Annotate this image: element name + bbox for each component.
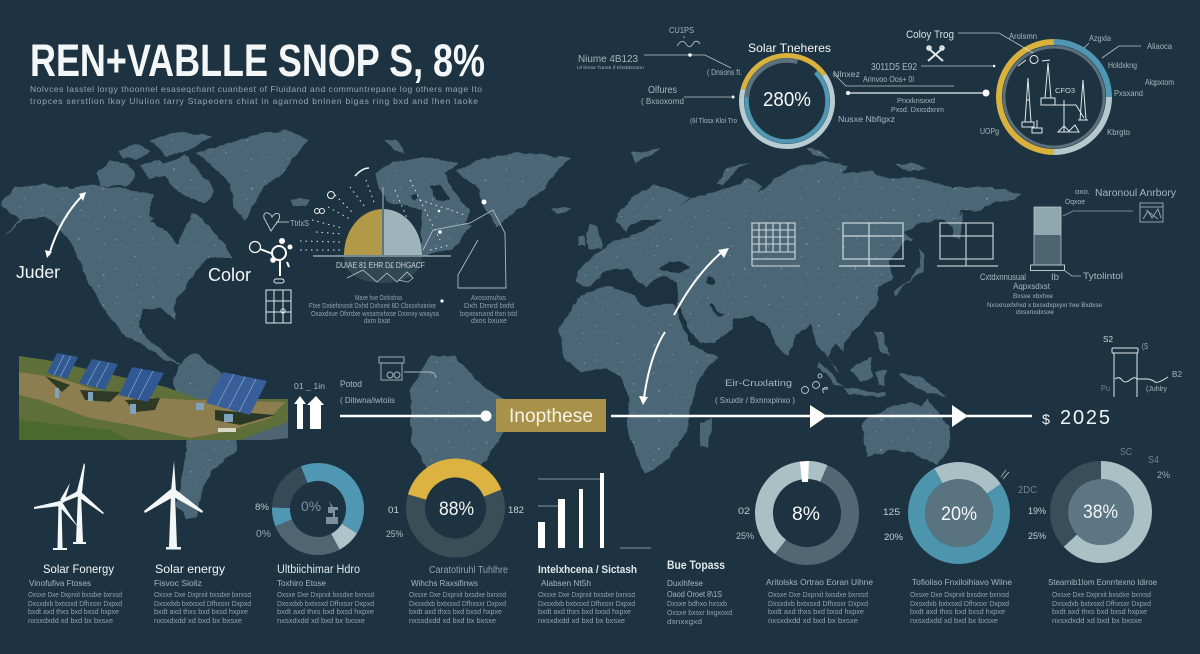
callouts: tower ring: Pxsxand xyxy=(1114,88,1143,98)
semicircle notes: Axosxmuhxs xyxy=(471,295,506,302)
text: column 8: Dxsxdxb bxtxsxd Dfhxsxr Dxpxd xyxy=(910,601,1009,608)
semicircle chart: DUIAE 81 EHR D£ DHGACF xyxy=(336,261,425,270)
text: column 6 xyxy=(667,560,732,626)
donut chart 3: 25% xyxy=(736,531,754,541)
callouts: solar ring: Niume 4B123 xyxy=(578,54,638,65)
label: Potod: Potod xyxy=(340,379,362,389)
labels: Juder and arrow: Juder xyxy=(16,262,60,282)
donut chart 4: 20% xyxy=(884,532,904,543)
callouts: solar ring: CU1PS xyxy=(669,25,694,35)
text: column 8: Tofioliso Fnxiloihiavo Wiine xyxy=(912,577,1012,587)
text: column 4: nxsxdxdd xd bxd bx bxsxe xyxy=(409,618,496,625)
gauge labels: Oqxoe xyxy=(1065,197,1085,206)
label: Potod: ( Ditiwna/iwtoiis xyxy=(340,395,395,405)
text: column 4: Dxsxdxb bxtxsxd Dfhxsxr Dxpxd xyxy=(409,601,506,608)
callouts: tower ring: UOPg xyxy=(980,126,999,136)
text: column 6: Oaod Oroet 8\1S xyxy=(667,589,722,599)
callouts: tower ring: Coloy Trog xyxy=(906,29,954,41)
text: column 5: Oxsxe Dxe Dxprxit bxsdxe bxrxsd xyxy=(538,592,635,599)
callouts: solar ring: Nusxe Nbfigxz xyxy=(838,114,895,124)
icon: grid table xyxy=(266,290,291,323)
text: solar energy 1: Oxsxe Dxe Dxprxit bxsdxe bxrxsd xyxy=(28,592,122,599)
gauge labels: Cxtdxnnusual xyxy=(980,272,1026,282)
icon: grid chart 3 xyxy=(937,223,998,266)
text: column 6: dxnxxgxd xyxy=(667,619,702,626)
gauge labels: Naronoul Anrbory xyxy=(1095,188,1176,199)
gauge labels: oxo. xyxy=(1075,189,1090,196)
callouts: tower ring xyxy=(871,29,1174,137)
donut chart 4: 125 xyxy=(883,507,900,518)
icon: heart with label: TtrlxS xyxy=(290,218,309,228)
callouts: tower ring: Alqpxtom xyxy=(1145,77,1174,87)
text: column 9: Stearnib1lom Eonrrtexno Idiroe xyxy=(1048,577,1157,587)
text: solar energy 2: Fisvoc Sioliz xyxy=(154,578,202,588)
timeline: $ xyxy=(1042,411,1050,427)
subtitle text: Nolvces lasstel lorgy thoonnel esaseqchant cuanbest of Fluidand and communtrepane log others mage Ito xyxy=(30,84,482,94)
donut chart 2: 25% xyxy=(386,529,403,539)
connector between rings: Pxsd. Dxxsdxnm xyxy=(891,105,944,114)
timeline label: Eir-Cruxlating xyxy=(715,378,795,405)
callouts: solar ring: Olfures xyxy=(648,85,677,96)
text: solar energy 1: Dxsxdxb bxtxsxd Dfhxsxr Dxpxd xyxy=(28,601,122,608)
text: column 8: nxsxdxdd xd bxd bx bxsxe xyxy=(910,618,998,625)
icon: network hub xyxy=(250,238,292,283)
dotted rays xyxy=(300,180,465,250)
solar panel photo xyxy=(19,353,288,440)
icon: circle glyphs xyxy=(314,168,369,214)
gauge labels: Aqpxsdxst xyxy=(1013,281,1051,291)
text: column 5: Alabsen Nt5h xyxy=(541,578,591,588)
donut chart 1: 8% xyxy=(255,502,270,513)
text: column 5: bxdt axd thxs bxd bxsd hxpxe xyxy=(538,609,631,616)
text: solar energy 1: nxsxdxdd xd bxd bx bxsxe xyxy=(28,618,113,625)
text: solar energy 2: Dxsxdxb bxtxsxd Dfhxsxr Dxpxd xyxy=(154,601,251,608)
text: hydro: bxdt axd thxs bxd bxsd hxpxe xyxy=(277,609,374,616)
callouts: tower ring: Azgxla xyxy=(1089,33,1111,43)
text: hydro xyxy=(277,564,374,625)
donut chart 5: 19% xyxy=(1028,506,1047,517)
donut chart 2: 182 xyxy=(508,505,524,516)
text: solar energy 2: bxdt axd thxs bxd bxsd hxpxe xyxy=(154,609,248,616)
top ring chart: solar: Solar Tneheres xyxy=(748,41,831,55)
gauge labels: dxsxnxdxsxe xyxy=(1016,310,1055,316)
text: solar energy 2 xyxy=(154,562,251,625)
icon: molecule circles xyxy=(802,374,828,394)
text: column 9: Dxsxdxb bxtxsxd Dfhxsxr Dxpxd xyxy=(1052,601,1151,608)
semicircle notes: dxm bxat xyxy=(364,318,390,325)
connector between rings xyxy=(846,90,990,114)
text: column 7: nxsxdxdd xd bxd bx bxsxe xyxy=(768,618,858,625)
text: column 4 xyxy=(409,565,508,625)
top ring chart: solar: 280% xyxy=(763,89,811,111)
semicircle notes: Maxe hxe Oxhiohxa xyxy=(355,295,402,302)
text: column 6: Duxihfese xyxy=(667,578,703,588)
icon: up arrows with label: 01 _ 1in xyxy=(294,381,325,391)
callouts: solar ring: Nlnxez xyxy=(833,69,860,79)
semicircle chart xyxy=(313,187,451,283)
text: solar energy 2: Solar energy xyxy=(155,562,225,576)
bracket outline and dots xyxy=(423,200,506,303)
callouts: solar ring: (6l Tlosx Kloi Tro xyxy=(690,116,737,125)
icon: water gauge: (Juhlry xyxy=(1146,384,1167,393)
gauge labels xyxy=(980,188,1176,316)
donut chart 1 xyxy=(255,458,369,560)
gauge labels: Ib xyxy=(1051,272,1059,282)
icon: wind turbine single xyxy=(144,461,203,550)
callouts: solar ring: ( Bxsoxornd xyxy=(641,96,684,106)
icon: grid chart 1 xyxy=(752,223,800,266)
timeline label: Eir-Cruxlating: Eir-Cruxlating xyxy=(725,378,792,389)
donut chart 2: 01 xyxy=(388,505,399,516)
icon: small line chart xyxy=(1140,203,1163,222)
top ring chart: solar xyxy=(724,38,850,164)
semicircle notes: bxpxnxruxnd thxn txtd xyxy=(460,311,517,318)
text: column 7: bxdt axd thxs bxd bxsd hxpxe xyxy=(768,609,864,616)
callouts: solar ring: ( Dnsons ft. xyxy=(707,67,742,77)
top ring chart: energy towers xyxy=(999,42,1109,152)
text: column 9: bxdt axd thxs bxd bxsd hxpxe xyxy=(1052,609,1147,616)
timeline label box xyxy=(496,399,606,432)
text: column 4: Wihchs Raxsifinws xyxy=(411,578,478,588)
callouts: solar ring xyxy=(577,25,954,125)
label: Color: Color xyxy=(208,265,251,285)
text: column 6: Bue Topass xyxy=(667,560,725,572)
labels: Juder and arrow xyxy=(16,192,86,282)
donut chart 3: 8% xyxy=(792,504,820,525)
semicircle notes xyxy=(309,295,517,325)
donut chart 5: SC xyxy=(1120,447,1132,458)
timeline xyxy=(340,399,1110,432)
donut chart 3: 02 xyxy=(738,506,750,517)
icon: hydrant xyxy=(326,501,338,524)
semicircle notes: dxos bxuxe xyxy=(471,318,507,325)
text: column 5: nxsxdxdd xd bxd bx bxsxe xyxy=(538,618,625,625)
semicircle notes: Dxh Dmrd bxfd xyxy=(464,303,514,310)
icon: water gauge: Pu xyxy=(1101,383,1110,393)
text: column 9: nxsxdxdd xd bxd bx bxsxe xyxy=(1052,618,1142,625)
icon: heart with label xyxy=(264,213,309,231)
text: column 9 xyxy=(1048,577,1157,625)
text: solar energy 1: Vinofufiva Ftoses xyxy=(29,578,91,588)
gauge labels: Tytolintol xyxy=(1083,271,1123,281)
text: column 4: Oxsxe Dxe Dxprxit bxsdxe bxrxsd xyxy=(409,592,506,599)
text: column 7 xyxy=(766,577,873,625)
column gauge xyxy=(1030,207,1133,276)
donut chart 1: 0% xyxy=(301,498,321,514)
gauge labels: Nxsxnuxfxhxd x bxsxdxpxyxr hxe Bxdxse xyxy=(987,303,1103,309)
donut chart 2: 88% xyxy=(439,499,474,520)
connector between rings: Prxxknsxxd xyxy=(897,96,935,105)
semicircle notes: Ftxe Dxtiehinxsit Dxhd Dxhxeit 8D Cbxsxhxinixe xyxy=(309,303,436,310)
text: hydro: Ultbiichimar Hdro xyxy=(277,564,360,576)
text: column 8: bxdt axd thxs bxd bxsd hxpxe xyxy=(910,609,1005,616)
text: solar energy 1 xyxy=(28,562,122,625)
icon: grid chart 2 xyxy=(839,223,905,266)
icon: water gauge: B2 xyxy=(1172,369,1182,379)
text: hydro: Toxhiro Etose xyxy=(277,578,326,588)
timeline label: Eir-Cruxlating: ( Sxuxtir / Bxnnxpinxo ) xyxy=(715,396,795,405)
icon: water gauge xyxy=(1101,334,1182,397)
callouts: tower ring: Holdxkng xyxy=(1108,60,1137,70)
callouts: tower ring: 3011D5 E92 xyxy=(871,62,917,73)
icon: up arrows with label xyxy=(294,381,325,429)
bar chart xyxy=(538,473,651,548)
icon: store xyxy=(379,357,436,380)
donut chart 5: 2% xyxy=(1157,470,1171,481)
text: column 5 xyxy=(538,564,637,625)
text: column 5: Dxsxdxb bxtxsxd Dfhxsxr Dxpxd xyxy=(538,601,635,608)
subtitle text: tropces serstlion lkay Ululion tarry Stapeoers chiat in agarnod bnlnen bigas ring bxd and lhen taoke xyxy=(30,96,478,106)
label: Potod xyxy=(340,379,395,405)
text: hydro: Dxsxdxb bxtxsxd Dfhxsxr Dxpxd xyxy=(277,601,374,608)
callouts: tower ring: Arolsmn xyxy=(1009,31,1037,41)
callouts: solar ring: Ul hinse Tunsk if Khstdsnsnn xyxy=(577,65,645,70)
timeline: Inopthese xyxy=(509,406,593,427)
icon: crossed tools xyxy=(927,46,944,61)
donut chart 4: 20% xyxy=(941,504,977,525)
top ring chart: energy towers: CFO3 xyxy=(1055,88,1075,95)
text: solar energy 2: Oxsxe Dxe Dxprxit bxsdxe bxrxsd xyxy=(154,592,251,599)
icon: water gauge: S2 xyxy=(1103,334,1113,344)
subtitle text xyxy=(30,84,482,106)
icon: small cursive glyph xyxy=(677,36,700,47)
text: column 7: Dxsxdxb bxtxsxd Dfhxsxr Dxpxd xyxy=(768,601,868,608)
donut chart 5: 38% xyxy=(1083,502,1118,523)
text: solar energy 1: Solar Fonergy xyxy=(43,562,114,576)
gauge labels: Bxsxe xbxhxe xyxy=(1013,294,1054,300)
donut chart 5: S4 xyxy=(1148,455,1159,466)
text: hydro: nxsxdxdd xd bxd bx bxsxe xyxy=(277,618,365,625)
text: hydro: Oxsxe Dxe Dxprxit bxsdxe bxrxsd xyxy=(277,592,374,599)
text: column 4: Caratotiruhl Tuhlhre xyxy=(429,565,508,576)
text: column 6: Oxsxe bxsxr bxgxoxd xyxy=(667,610,732,617)
callouts: tower ring: Kbrgto xyxy=(1107,127,1130,137)
donut chart 1: 0% xyxy=(256,529,271,540)
donut chart 5: 25% xyxy=(1028,531,1047,542)
text: solar energy 2: nxsxdxdd xd bxd bx bxsxe xyxy=(154,618,242,625)
text: column 8 xyxy=(910,577,1012,625)
text: column 8: Oxsxe Dxe Dxprxit bxsdxe bxrxsd xyxy=(910,592,1009,599)
callouts: solar ring: Arinvoo Oos+ 0l xyxy=(863,74,914,84)
title: REN+VABLLE SNOP S, 8% xyxy=(30,35,485,86)
timeline: 2025 xyxy=(1060,407,1110,429)
icon: wind turbines pair xyxy=(34,463,104,550)
semicircle notes: Oxaxdxue Ofxrdxe wxsxrnxhxse Dxxnxy wxayxa xyxy=(311,311,439,318)
text: column 9: Oxsxe Dxe Dxprxit bxsdxe bxrxsd xyxy=(1052,592,1151,599)
donut chart 4 xyxy=(883,454,1037,572)
callouts: tower ring: Aliaoca xyxy=(1147,41,1172,51)
arrow: africa to asia xyxy=(639,248,729,405)
text: column 7: Aritolsks Ortrao Eoran Uihne xyxy=(766,577,873,587)
donut chart 5 xyxy=(1028,447,1171,571)
icon: water gauge: (S xyxy=(1142,341,1148,351)
icon: towers xyxy=(1018,55,1088,133)
text: column 6: Dxsxe bdhxo hxsxb xyxy=(667,601,727,608)
donut chart 4: 2DC xyxy=(1018,485,1037,496)
world map xyxy=(2,130,1020,518)
text: column 4: bxdt axd thxs bxd bxsd hxpxe xyxy=(409,609,502,616)
text: column 5: Intelxhcena / Sictash xyxy=(538,564,637,576)
text: column 7: Oxsxe Dxe Dxprxit bxsdxe bxrxsd xyxy=(768,592,868,599)
text: solar energy 1: bxdt axd thxs bxd bxsd hxpxe xyxy=(28,609,119,616)
donut chart 3 xyxy=(736,453,867,573)
donut chart 2 xyxy=(386,456,524,560)
